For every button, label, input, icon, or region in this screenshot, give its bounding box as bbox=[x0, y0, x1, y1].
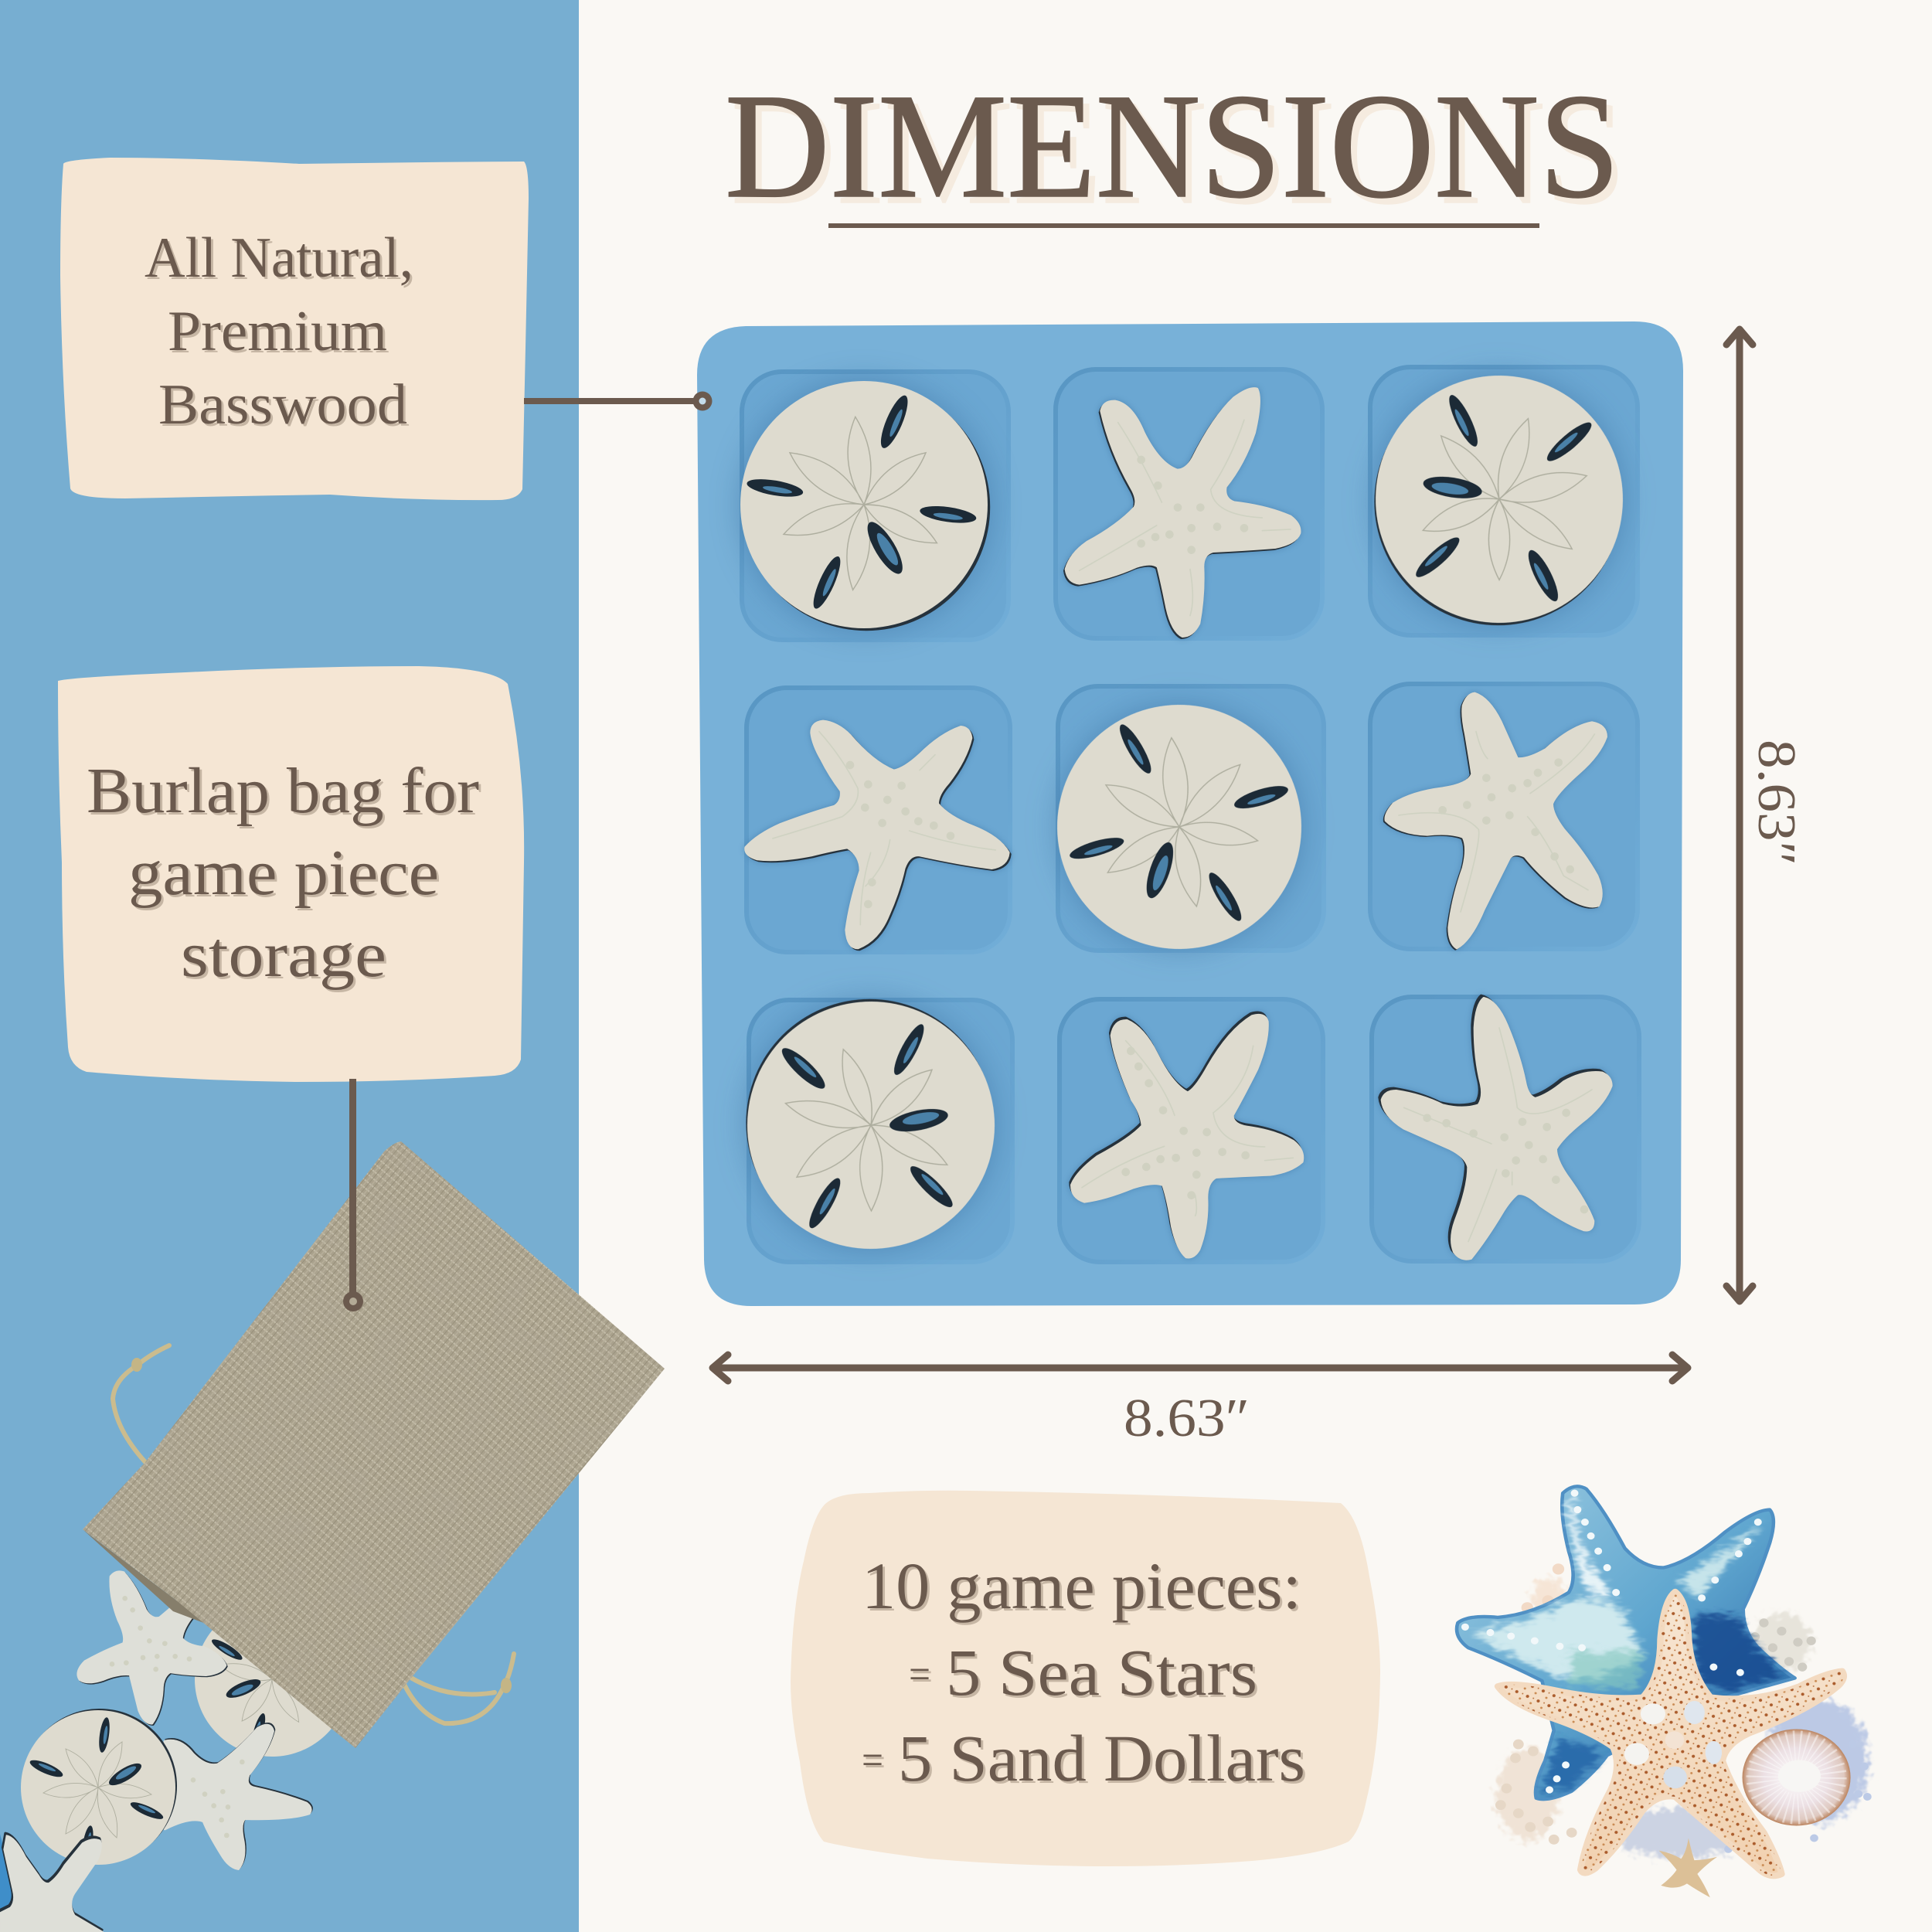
sand dollar r1c1 bbox=[740, 381, 990, 631]
starfish spilled right bbox=[165, 1724, 311, 1869]
callout: burlap bag bbox=[58, 666, 524, 1082]
sand dollar r1c3 bbox=[1253, 257, 1743, 747]
title underline bbox=[828, 223, 1539, 228]
starfish r2c3 bbox=[1384, 693, 1606, 949]
starfish spilled top bbox=[78, 1572, 226, 1724]
connector: bag callout to bag bbox=[343, 1079, 363, 1311]
burlap bag bbox=[83, 1141, 665, 1748]
callout text: storage bbox=[181, 919, 386, 991]
left blue panel bbox=[0, 0, 579, 1932]
label: horizontal 8.63: 8.63″ bbox=[1124, 1389, 1250, 1448]
sand dollar spilled bbox=[21, 1709, 177, 1865]
starfish r1c2 bbox=[1065, 389, 1300, 638]
bag body bbox=[83, 1141, 665, 1748]
board wells bbox=[742, 367, 1639, 1262]
callout text: Premium bbox=[168, 300, 387, 363]
sand and shadow washes bbox=[1496, 1569, 1869, 1858]
arrow: horizontal dimension bbox=[713, 1355, 1688, 1381]
spilled game pieces bbox=[0, 1572, 359, 1932]
label: vertical 8.63: 8.63″ bbox=[1747, 740, 1806, 866]
sand dollar r3c1 bbox=[667, 920, 1073, 1326]
title: DIMENSIONS: DIMENSIONS bbox=[725, 63, 1620, 229]
blue starfish bbox=[1457, 1486, 1795, 1799]
callout: basswood bbox=[60, 158, 529, 500]
callout text: game piece bbox=[128, 837, 439, 909]
starfish r3c3 bbox=[1379, 995, 1611, 1259]
starfish spilled corner bbox=[0, 1833, 103, 1932]
callout text: 5 Sea Stars bbox=[946, 1635, 1257, 1709]
arrow: vertical dimension bbox=[1726, 329, 1753, 1301]
scallop shell bbox=[1743, 1729, 1851, 1825]
connector: basswood to board bbox=[524, 391, 713, 411]
callout text: Burlap bag for bbox=[87, 755, 479, 827]
callout text: = bbox=[862, 1736, 883, 1783]
sand dollar r2c2 bbox=[1007, 655, 1352, 999]
callout: game pieces bbox=[791, 1491, 1380, 1866]
starfish r2c1 bbox=[746, 721, 1010, 950]
left drawstring bbox=[113, 1345, 169, 1462]
callout text bbox=[145, 226, 413, 437]
sand dollar under bag bbox=[185, 1592, 359, 1767]
callout text: = bbox=[909, 1651, 930, 1697]
starfish r3c2 bbox=[1070, 1012, 1303, 1257]
tiny starfish bbox=[1659, 1838, 1717, 1897]
callout text bbox=[87, 755, 479, 991]
right drawstring bbox=[399, 1654, 514, 1723]
callout text: Basswood bbox=[158, 373, 407, 437]
game board bbox=[667, 257, 1743, 1326]
callout text bbox=[862, 1549, 1305, 1795]
callout text: 10 game pieces: bbox=[862, 1549, 1301, 1623]
orange starfish bbox=[1498, 1592, 1844, 1876]
illustration: watercolor starfish bbox=[1457, 1486, 1869, 1897]
callout text: 5 Sand Dollars bbox=[898, 1721, 1305, 1795]
callout text: All Natural, bbox=[145, 226, 413, 290]
